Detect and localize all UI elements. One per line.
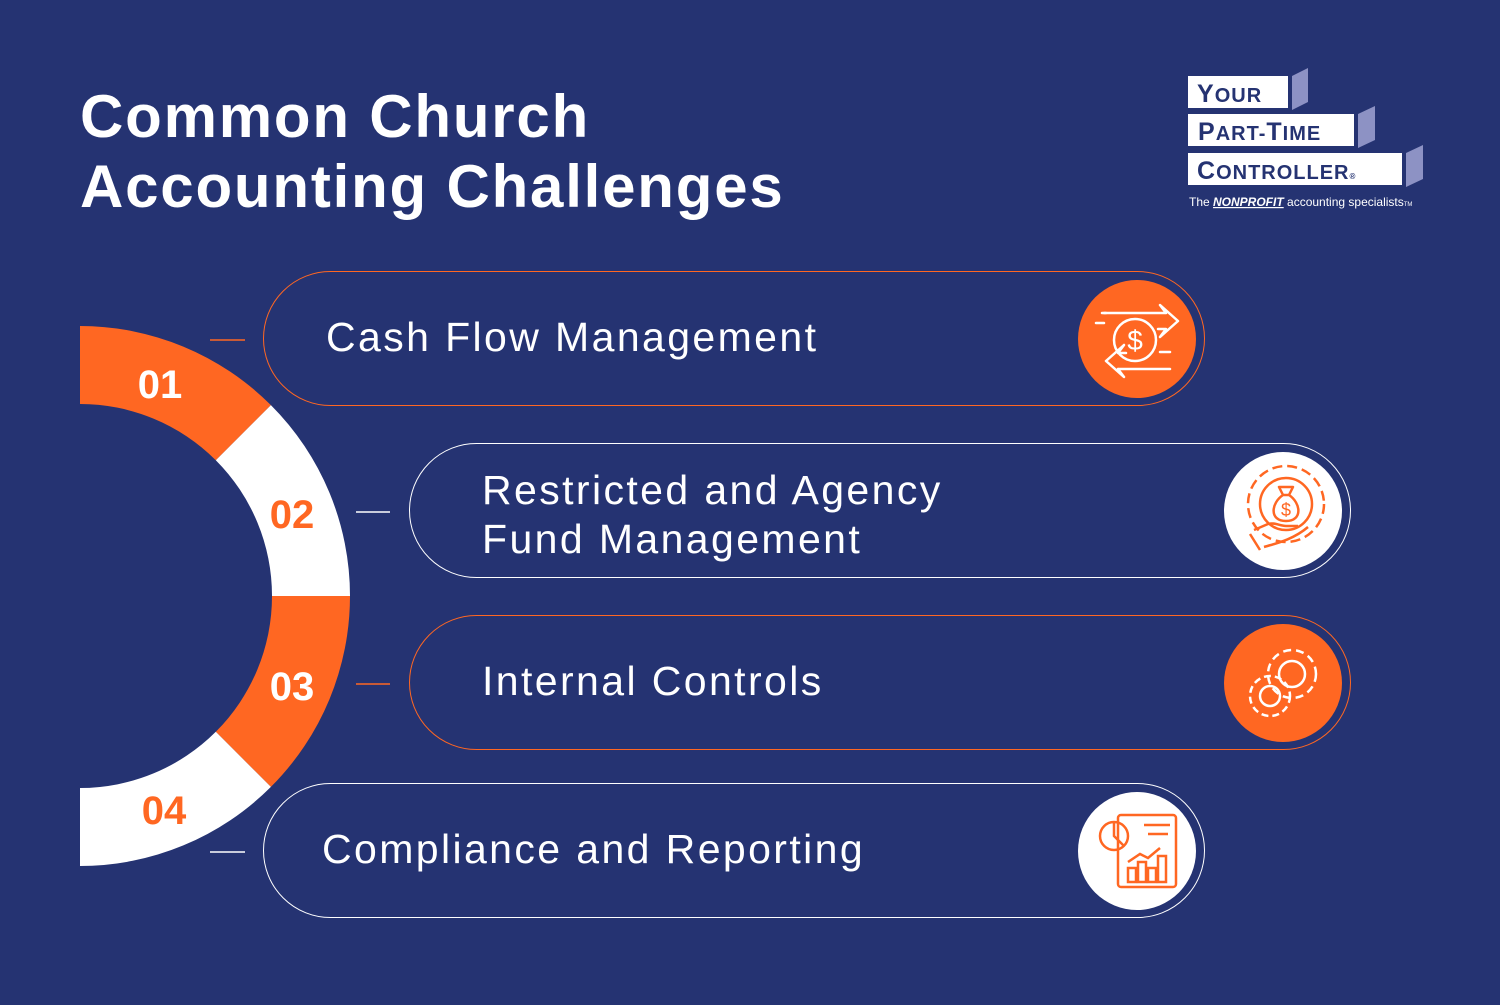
icon: exchange dollar <box>1078 280 1196 398</box>
title: Common Church <box>80 83 590 150</box>
logo: PART-TIME <box>1198 118 1321 146</box>
heading <box>482 467 943 562</box>
title: Accounting Challenges <box>80 153 785 220</box>
panel: cash flow <box>263 271 1205 406</box>
heading: Internal Controls <box>482 658 824 704</box>
title <box>80 83 785 220</box>
heading: Compliance and Reporting <box>322 826 865 872</box>
segment 04: 04 <box>142 789 187 833</box>
heading: Fund Management <box>482 516 862 562</box>
icon: exchange dollar: $ <box>1127 325 1143 356</box>
logo: YOUR <box>1197 80 1262 108</box>
icon: gears <box>1224 624 1342 742</box>
icon: report chart <box>1078 792 1196 910</box>
segment 04 <box>80 732 271 866</box>
segment 02: 02 <box>270 493 314 537</box>
segment 03 <box>216 596 350 787</box>
panel: internal controls <box>409 615 1351 750</box>
icon: money bag gear: $ <box>1281 500 1291 520</box>
logo: The NONPROFIT accounting specialistsTM <box>1189 195 1412 209</box>
segment 01 <box>80 326 271 460</box>
logo <box>1188 68 1423 209</box>
heading: Restricted and Agency <box>482 467 943 513</box>
heading: Cash Flow Management <box>326 314 818 360</box>
segment 03: 03 <box>270 665 314 709</box>
segment 02 <box>216 405 350 596</box>
logo: CONTROLLER® <box>1197 157 1356 185</box>
icon: money bag gear <box>1224 452 1342 570</box>
panel: compliance <box>263 783 1205 918</box>
segment 01: 01 <box>138 363 182 407</box>
arc diagram <box>80 326 390 866</box>
panel: restricted funds <box>409 443 1351 578</box>
